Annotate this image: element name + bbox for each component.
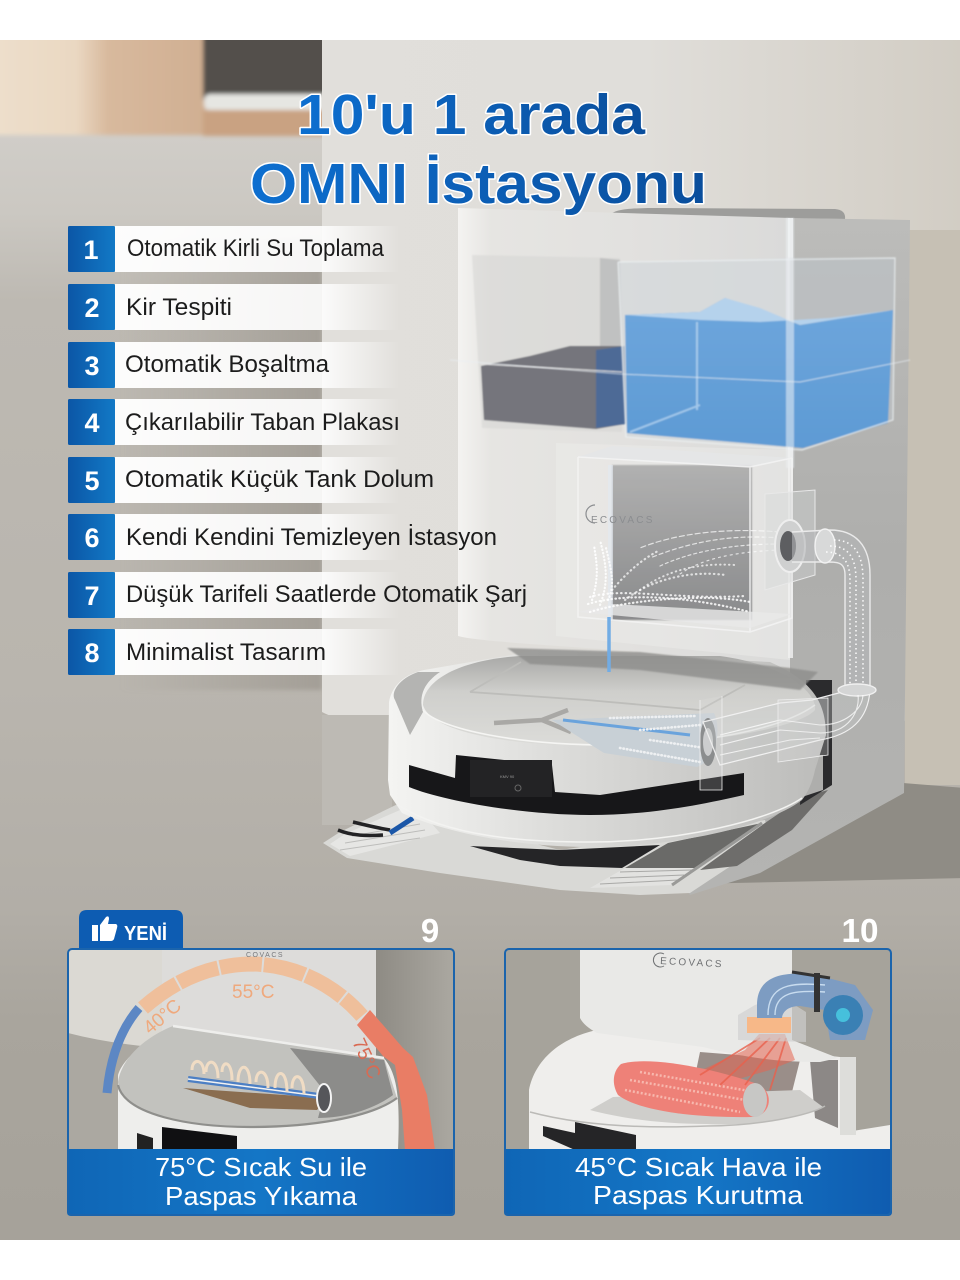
water spray <box>588 531 780 612</box>
station body <box>580 950 838 1062</box>
feature list <box>68 226 527 675</box>
list item 4: 4 <box>84 408 100 438</box>
robot disc <box>590 1090 823 1124</box>
wash illustration: 55°C <box>232 982 274 1003</box>
shadow under station <box>507 648 818 690</box>
temperature arc <box>107 1008 139 1093</box>
list item 3: 3 <box>84 351 100 381</box>
robot body <box>118 1058 399 1149</box>
window <box>543 1122 636 1150</box>
list item 2: Kir Tespiti <box>126 294 232 321</box>
blue vertical water line <box>607 617 611 672</box>
panel: hot air mop dry <box>504 949 892 1216</box>
list item 7 <box>68 572 527 618</box>
bumper line <box>398 798 802 842</box>
panel: hot water mop wash <box>67 949 455 1216</box>
caption bar <box>67 1149 455 1216</box>
list item 1: Otomatik Kirli Su Toplama <box>127 235 385 262</box>
icon: thumbs up <box>92 916 117 941</box>
mat / dock base <box>323 790 828 895</box>
panel: hot water mop wash: Paspas Yıkama <box>165 1181 358 1211</box>
dock and robot body <box>529 1030 890 1150</box>
list item 2 <box>68 284 400 330</box>
mop roller <box>614 1061 769 1117</box>
list item 4 <box>68 399 400 445</box>
ecovacs logo: ECOVACS <box>591 515 655 526</box>
panel: hot air mop dry: Paspas Kurutma <box>593 1180 804 1210</box>
dark recess <box>700 790 828 870</box>
blue air duct <box>757 974 873 1040</box>
right ramp stripes <box>625 823 762 868</box>
pipe connector and elbow <box>765 490 870 690</box>
wash illustration <box>68 950 454 1150</box>
title: 10'u 1 arada <box>297 83 646 147</box>
station front face <box>458 208 790 668</box>
panel: hot water mop wash: 75°C Sıcak Su ile <box>155 1152 367 1182</box>
caption bar <box>504 1149 892 1216</box>
ecovacs logo <box>652 952 721 968</box>
Y mark <box>494 710 571 732</box>
station lid <box>610 208 845 219</box>
list item 5: 5 <box>84 466 100 496</box>
list item 8: Minimalist Tasarım <box>126 639 326 666</box>
underbody shadow <box>470 845 660 868</box>
left tank <box>472 255 626 432</box>
robot body <box>388 650 826 847</box>
list item 1: 1 <box>83 235 99 265</box>
window and sensor module: KMV 90 <box>500 774 515 779</box>
list item 2: 2 <box>84 293 100 323</box>
wash illustration: 40°C <box>140 995 186 1039</box>
dry illustration <box>505 950 891 1150</box>
heater block <box>738 1004 806 1042</box>
card border <box>68 949 454 1215</box>
right tank with blue water <box>450 218 910 468</box>
list item 4: Çıkarılabilir Taban Plakası <box>125 409 400 436</box>
station side face <box>680 218 910 895</box>
wash illustration: 75°C <box>347 1035 384 1083</box>
title: OMNI İstasyonu <box>250 152 707 216</box>
list item 8 <box>68 629 400 675</box>
station <box>450 208 910 895</box>
list item 8: 8 <box>84 638 100 668</box>
list item 6: 6 <box>84 523 100 553</box>
panel: new badge: YENİ <box>124 922 167 945</box>
robot disc <box>118 1026 397 1127</box>
list item 3 <box>68 342 400 388</box>
list item 5: Otomatik Küçük Tank Dolum <box>125 466 434 493</box>
list item 7: Düşük Tarifeli Saatlerde Otomatik Şarj <box>126 581 527 608</box>
robot dark rear shadow <box>800 680 832 805</box>
wash illustration: COVACS <box>246 952 284 959</box>
robot groove <box>394 672 440 735</box>
list item 5 <box>68 457 434 503</box>
list item 1 <box>68 226 400 272</box>
mop roller <box>552 713 717 767</box>
robot vacuum <box>388 617 876 847</box>
title <box>250 83 707 216</box>
left bristle zone <box>330 810 440 856</box>
transparent pipe to robot <box>700 684 876 790</box>
list item 6: Kendi Kendini Temizleyen İstasyon <box>126 524 497 551</box>
ecovacs logo: ECOVACS <box>660 956 724 970</box>
panel: new badge <box>79 910 183 948</box>
number 9: 9 <box>421 912 439 949</box>
list item 7: 7 <box>84 581 100 611</box>
list item 6 <box>68 514 497 560</box>
small dirty water box <box>556 443 792 660</box>
mat plate <box>323 803 770 895</box>
number 10: 10 <box>842 912 878 949</box>
window and sensor module <box>409 755 744 815</box>
list item 3: Otomatik Boşaltma <box>125 351 330 378</box>
robot top disc <box>423 656 815 746</box>
ecovacs logo <box>586 505 655 526</box>
red hot air flow <box>704 1034 795 1078</box>
card border <box>505 949 891 1215</box>
panel: hot air mop dry: 45°C Sıcak Hava ile <box>575 1152 822 1182</box>
